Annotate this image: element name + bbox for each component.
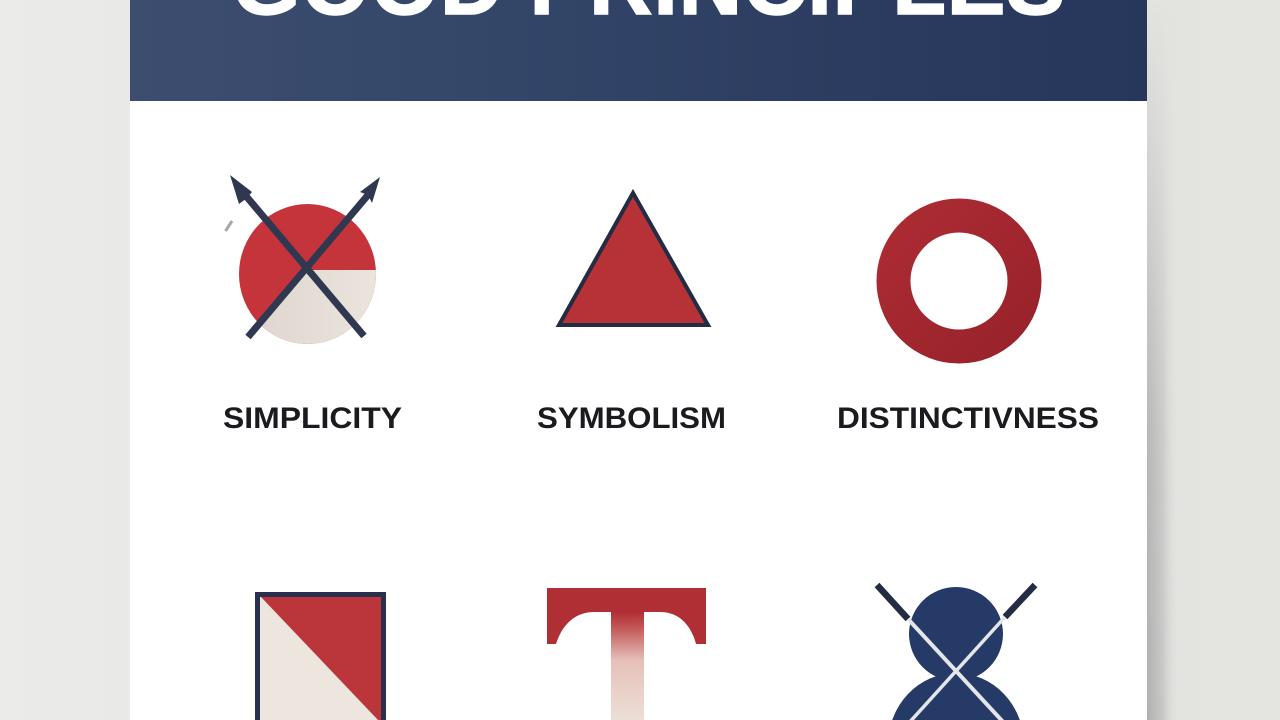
icon: red ring: [894, 216, 1024, 346]
poster panel: [130, 0, 1147, 720]
principle: symbolism: [537, 193, 726, 435]
icon: letter T: [547, 588, 706, 720]
icon: figure with crossed lines: [877, 585, 1035, 720]
label: DISTINCTIVNESS: [837, 402, 1099, 435]
principle: simplicity: [223, 175, 402, 435]
icon: split rectangle: [255, 592, 386, 720]
label: SIMPLICITY: [223, 402, 402, 435]
icon: pie circle with crossed arrows: [224, 175, 380, 344]
label: SYMBOLISM: [537, 402, 726, 435]
header banner: [130, 0, 1147, 101]
icon: red triangle: [559, 193, 708, 325]
principle: distinctiveness: [837, 216, 1099, 435]
